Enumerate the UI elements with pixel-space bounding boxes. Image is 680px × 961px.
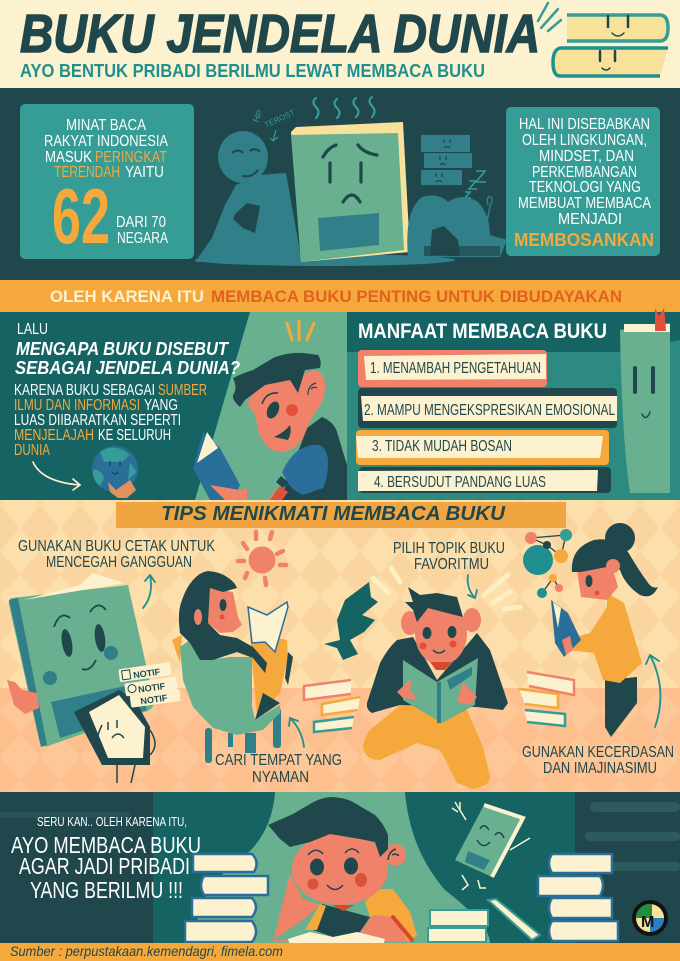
person with phone (195, 131, 302, 263)
text: question: KE SELURUH (98, 427, 171, 444)
icon: smiling book stack (553, 15, 668, 76)
text: question: LALU (17, 321, 48, 338)
boy leaning on hand (268, 797, 417, 945)
icon: attention ticks (287, 321, 314, 340)
card: reasons: PERKEMBANGAN (532, 164, 637, 181)
number 62: 62 (52, 172, 110, 260)
card: reading rank: YAITU (125, 164, 164, 181)
footer: source: Sumber : perpustakaan.kemendagri, fimela.com (10, 943, 283, 959)
icon: sun (238, 532, 286, 585)
banner: importance of reading: OLEH KARENA ITU (50, 287, 204, 306)
card: reading rank: RAKYAT INDONESIA (44, 133, 168, 150)
sad book stack (421, 135, 472, 185)
tip: printed book (7, 538, 215, 783)
benefit 3 (356, 430, 609, 465)
text: HP terus (251, 108, 296, 141)
book stack right (519, 672, 574, 726)
icon: globe on book (92, 446, 138, 498)
card: reading rank: NEGARA (117, 230, 168, 247)
text: question: KARENA BUKU SEBAGAI (14, 382, 155, 399)
tip: comfortable place: NYAMAN (252, 769, 309, 786)
tip: favorite topic: FAVORITMU (414, 556, 489, 573)
book stack right (538, 854, 618, 941)
tip: imagination (519, 523, 674, 777)
text: question: LUAS DIIBARATKAN SEPERTI (14, 412, 181, 429)
closing text: AGAR JADI PRIBADI (19, 853, 190, 879)
text: question: ILMU DAN INFORMASI (14, 397, 140, 414)
icon: sparkle lines (538, 3, 561, 31)
text: HP terus: TEROST (263, 108, 296, 130)
tip: printed book: MENCEGAH GANGGUAN (46, 554, 192, 571)
card: reading rank: MASUK (45, 149, 92, 166)
tip: favorite topic: PILIH TOPIK BUKU (393, 540, 505, 557)
text: question (14, 321, 240, 459)
icon: logo badge: M (641, 914, 654, 931)
ground shadow (195, 254, 455, 266)
girl on chair (172, 571, 293, 763)
text: question: SEBAGAI JENDELA DUNIA? (15, 358, 240, 378)
card: reasons (506, 107, 660, 256)
text: question: DUNIA (14, 442, 50, 459)
closing text: AYO MEMBACA BUKU (11, 832, 201, 858)
notification labels (118, 662, 181, 708)
card: reading rank: PERINGKAT (95, 149, 167, 166)
benefit 1: 1. MENAMBAH PENGETAHUAN (370, 360, 541, 377)
book pile centre (428, 899, 540, 942)
imagination rays (373, 568, 520, 609)
faint wall stripes (0, 802, 680, 871)
benefit 4: 4. BERSUDUT PANDANG LUAS (374, 474, 546, 491)
heading: MANFAAT MEMBACA BUKU (358, 320, 607, 343)
reading boy (193, 321, 347, 500)
banner: importance of reading: MEMBACA BUKU PENTING UNTUK DIBUDAYAKAN (211, 287, 622, 306)
text: question: YANG (144, 397, 178, 414)
card: reasons: MEMBUAT MEMBACA (518, 195, 651, 212)
notification labels: NOTIF (140, 693, 168, 706)
closing text: YANG BERILMU !!! (30, 877, 183, 903)
icon: dinosaur (324, 582, 378, 660)
panel: why books are windows (0, 312, 347, 500)
illustration: phone user, sad book, sleeper (195, 97, 507, 266)
book stack left (185, 854, 268, 942)
curtain (195, 792, 490, 943)
notification labels: NOTIF (138, 681, 166, 695)
panel: benefits of reading (347, 308, 680, 500)
text: HP terus: HP (251, 108, 265, 124)
title: BUKU JENDELA DUNIA (20, 4, 540, 64)
text: question: MENJELAJAH (14, 427, 94, 444)
icon: molecules (523, 529, 572, 598)
tip: comfortable place (172, 532, 360, 786)
footer: source (0, 943, 680, 961)
icon: bookmark (655, 308, 666, 331)
header panel (0, 0, 680, 88)
panel: low reading interest (0, 88, 680, 280)
tip: printed book: GUNAKAN BUKU CETAK UNTUK (18, 538, 215, 555)
card: reasons: TEKNOLOGI YANG (529, 179, 641, 196)
subtitle: AYO BENTUK PRIBADI BERILMU LEWAT MEMBACA BUKU (20, 61, 485, 81)
notification labels: NOTIF (133, 667, 161, 680)
text: question: SUMBER (158, 382, 207, 399)
sleeping person (407, 195, 507, 257)
benefit 3: 3. TIDAK MUDAH BOSAN (372, 438, 512, 455)
closing text (11, 814, 201, 903)
card: reading rank (20, 104, 194, 260)
tip: comfortable place: CARI TEMPAT YANG (215, 752, 342, 769)
benefit 2 (358, 388, 617, 428)
phone character (74, 690, 155, 783)
panel: closing call to action (0, 792, 680, 945)
standing girl (551, 523, 658, 737)
icon: steam (314, 97, 374, 118)
side book character (620, 308, 670, 493)
card: reasons: MENJADI (558, 211, 622, 228)
card: reading rank: MINAT BACA (66, 117, 146, 134)
arrow (33, 462, 80, 490)
benefit 1 (358, 350, 547, 387)
banner: importance of reading (0, 280, 680, 312)
card: reading rank: DARI 70 (116, 214, 166, 231)
text: question: MENGAPA BUKU DISEBUT (16, 339, 230, 359)
card: reasons: OLEH LINGKUNGAN, (522, 132, 647, 149)
sad book character (291, 122, 410, 262)
book stack left (304, 680, 360, 732)
benefit 4 (358, 467, 611, 493)
tips heading: TIPS MENIKMATI MEMBACA BUKU (161, 503, 506, 525)
card: reading rank: TERENDAH (54, 164, 120, 181)
reading boy (363, 587, 508, 789)
closing text: SERU KAN.. OLEH KARENA ITU, (37, 814, 187, 829)
tips heading (116, 502, 566, 528)
panel: tips (0, 500, 680, 792)
book mascot (7, 573, 154, 747)
zzz (465, 171, 486, 198)
card: reasons: MINDSET, DAN (539, 148, 634, 165)
tip: favorite topic (324, 540, 520, 789)
icon: logo badge (632, 900, 668, 936)
card: reasons: MEMBOSANKAN (514, 230, 654, 250)
card: reasons: HAL INI DISEBABKAN (519, 116, 650, 133)
flying happy book (452, 802, 530, 890)
